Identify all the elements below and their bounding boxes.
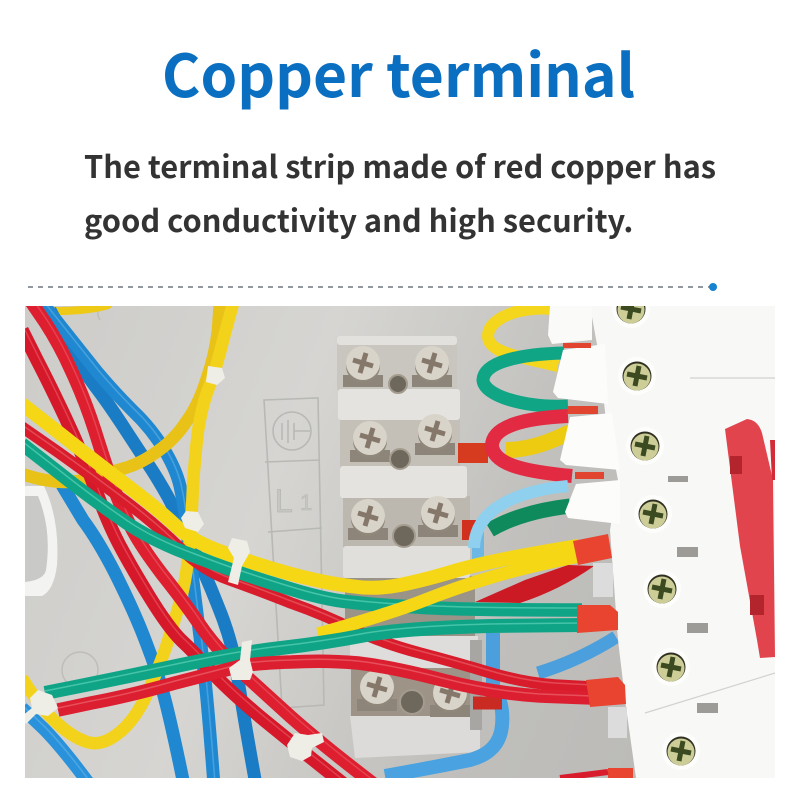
- breakers: [548, 290, 775, 778]
- conduit hole: [25, 486, 57, 596]
- blue wires behind: [22, 300, 256, 785]
- red collars: [563, 343, 591, 348]
- blue wire highlights: [23, 298, 215, 783]
- handle slots: [730, 456, 764, 615]
- photo: wired distribution box: [25, 306, 775, 778]
- terminal screws: [343, 346, 383, 387]
- yellow wire inside red loop: [506, 432, 570, 450]
- breaker loop wires: [385, 309, 616, 776]
- embossed panel with L1 marking: 1: [300, 490, 312, 515]
- yellow wire: main: [22, 404, 578, 588]
- box background: [25, 306, 775, 778]
- block body: [337, 336, 457, 392]
- breaker screws: [612, 290, 650, 328]
- bottom red wire: [560, 772, 608, 778]
- cable ties: [22, 366, 324, 761]
- yellow wires behind: [22, 300, 234, 743]
- yellow loop: [488, 309, 558, 366]
- short yellow wire top left: [55, 305, 108, 311]
- red ferrule stubs: [458, 443, 488, 463]
- red wire: lower: [58, 661, 592, 710]
- terminal tabs: [548, 306, 592, 344]
- dashed divider with blue dot: [28, 283, 717, 291]
- red loop: [492, 416, 572, 476]
- grey transparent tabs: [593, 563, 613, 597]
- text block: description: good conductivity and high security.: [84, 196, 633, 241]
- breaker body: [590, 306, 775, 778]
- red wire: middle: [22, 427, 592, 687]
- embossed panel with L1 marking: L: [275, 483, 293, 519]
- green under light blue: [490, 506, 570, 530]
- dark red wedge: [475, 565, 594, 603]
- seams: [645, 378, 775, 713]
- terminal block: [337, 336, 482, 758]
- green wire: upper: [22, 444, 582, 610]
- light blue loop: [474, 486, 568, 548]
- upper red wires: [22, 298, 377, 785]
- text block: description: [84, 142, 716, 241]
- blue wire under terminal: [486, 633, 500, 700]
- main wires: [22, 404, 592, 710]
- embossed panel with L1 marking: [264, 398, 324, 708]
- yellow wire: second: [318, 556, 580, 634]
- red breaker handle: [725, 419, 775, 658]
- green wire: lower: [45, 625, 582, 693]
- metal clips: [668, 476, 718, 713]
- wire ferrules: [573, 534, 633, 778]
- text block: description: The terminal strip made of red copper has: [84, 142, 716, 187]
- centre screws: [389, 375, 424, 714]
- white straps: [338, 389, 460, 420]
- round mould marks: [62, 306, 112, 688]
- green loop: [483, 353, 568, 406]
- title: Copper terminal: [162, 29, 635, 114]
